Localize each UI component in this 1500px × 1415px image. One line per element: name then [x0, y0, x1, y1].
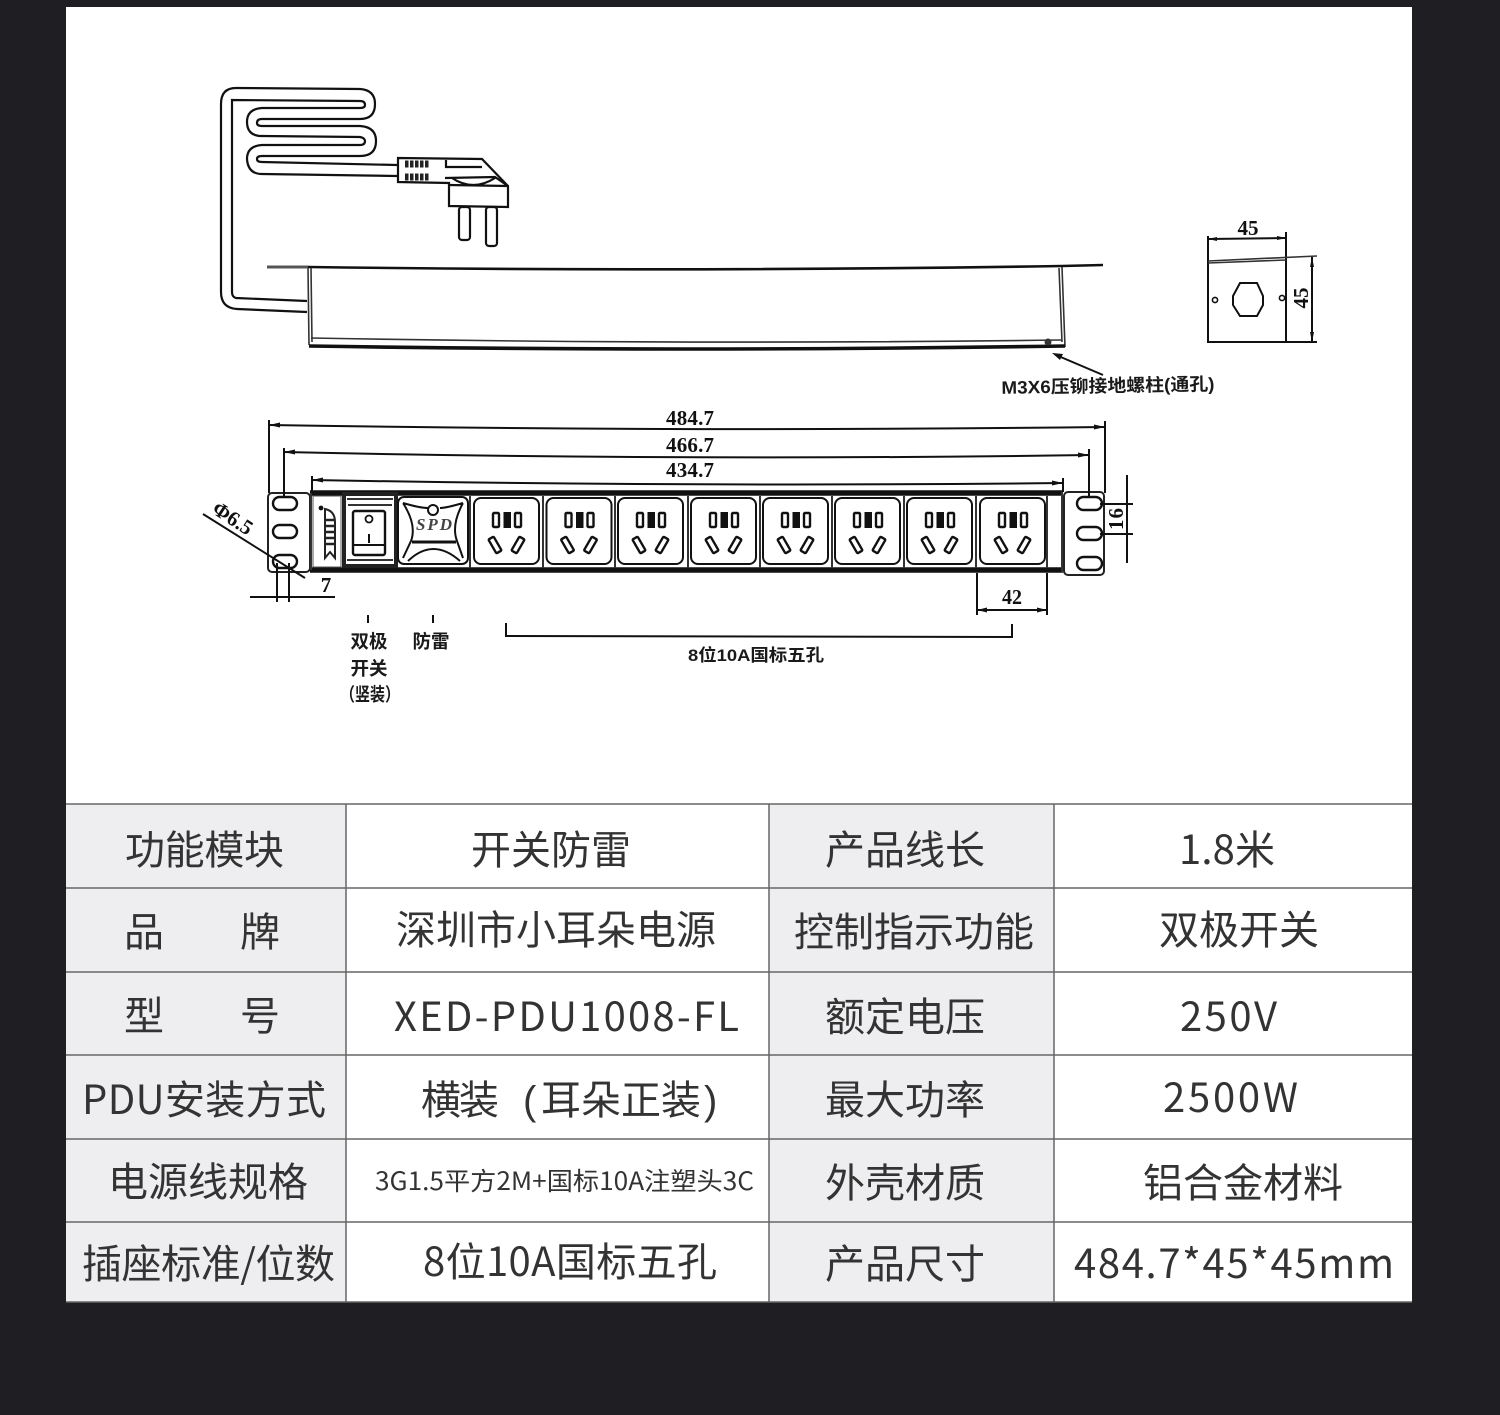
strip body: [310, 490, 1063, 572]
row: power cord: 外壳材质: [825, 1162, 985, 1206]
label cell backgrounds: [66, 804, 1054, 1302]
row: power cord: 电源线规格: [108, 1161, 308, 1205]
row: power cord: 3G1.5平方2M+国标10A注塑头3C: [375, 1162, 754, 1198]
end view with dimensions: [1208, 216, 1317, 342]
callout: double pole switch: 双极: [350, 631, 388, 652]
row: mounting: 最大功率: [825, 1079, 985, 1123]
technical drawing: power cord and plug: [221, 88, 508, 312]
row: function module: 功能模块: [125, 829, 284, 873]
row: model: XED-PDU1008-FL: [394, 985, 739, 1043]
row: model: 250V: [1180, 985, 1277, 1043]
row: socket standard: 484.7*45*45mm: [1074, 1232, 1394, 1290]
left mounting ear: [268, 493, 310, 572]
dimension: socket pitch 42: 42: [1002, 585, 1022, 609]
lightning protection module: [398, 497, 468, 564]
front view of the PDU: [268, 490, 1104, 575]
row: model: [124, 985, 1277, 1043]
callout: double pole switch: （竖装）: [340, 684, 400, 705]
dimension: 484.7: 484.7: [666, 406, 714, 430]
lightning protection module: SPD: [416, 515, 454, 534]
row: mounting: PDU安装方式: [82, 1068, 326, 1126]
rocker switch: [344, 494, 396, 566]
callout: eight sockets: 8位10A国标五孔: [688, 645, 824, 665]
right mounting ear: [1064, 492, 1104, 575]
row: function module: 1.8米: [1179, 818, 1275, 876]
arrow: ground stud: [1056, 355, 1103, 375]
hole diameter dimension: Φ6.5: [208, 496, 258, 540]
row: brand: 牌: [240, 911, 280, 955]
row: function module: [125, 818, 1275, 876]
brand cell: [313, 496, 341, 567]
row: mounting: 横装: [421, 1079, 499, 1123]
row: socket standard: 8位10A国标五孔: [423, 1230, 717, 1288]
plug: [398, 158, 508, 246]
end view with dimensions: 45: [1238, 216, 1258, 240]
row: mounting: 耳朵正装: [541, 1079, 701, 1123]
row: brand: 品: [124, 911, 164, 955]
callout: lightning protection: [412, 615, 450, 652]
row: brand: 控制指示功能: [794, 911, 1034, 955]
callout: lightning protection: 防雷: [412, 631, 450, 652]
hole diameter dimension: [203, 496, 335, 602]
power cord: [221, 88, 397, 312]
row: mounting: ): [704, 1079, 717, 1123]
dimension: 466.7: 466.7: [666, 433, 714, 457]
row: brand: 双极开关: [1159, 909, 1319, 953]
row: model: 额定电压: [825, 996, 985, 1040]
callout: eight sockets: [506, 623, 1012, 665]
row: mounting: 2500W: [1163, 1066, 1298, 1124]
side view of the PDU chassis: [267, 265, 1103, 375]
row: function module: 产品线长: [825, 829, 985, 873]
callout: double pole switch: [340, 615, 400, 705]
row: model: 号: [240, 995, 280, 1039]
dimension: socket pitch 42: [977, 573, 1047, 615]
dimension: hole spacing 16: 16: [1104, 508, 1128, 530]
hole diameter dimension: 7: [321, 573, 331, 597]
row: function module: 开关防雷: [471, 829, 631, 873]
dimension: hole spacing 16: [1100, 475, 1133, 563]
row: socket standard: [82, 1230, 1394, 1290]
row: power cord: 铝合金材料: [1143, 1162, 1343, 1206]
width dimension lines: [269, 406, 1105, 498]
ground stud label: M3X6压铆接地螺柱(通孔): [1001, 374, 1215, 398]
panel: drawing background: [66, 7, 1412, 804]
row: mounting: [82, 1066, 1298, 1126]
row: power cord: [108, 1161, 1343, 1206]
row: socket standard: 插座标准/位数: [82, 1232, 335, 1290]
row: socket standard: 产品尺寸: [825, 1243, 985, 1287]
spec table: [66, 804, 1412, 1302]
end view with dimensions: 45: [1289, 288, 1313, 308]
dimension: 434.7: 434.7: [666, 458, 714, 482]
row: brand: [124, 909, 1319, 955]
eight sockets: [474, 498, 1045, 564]
row: model: 型: [124, 995, 164, 1039]
callout: double pole switch: 开关: [350, 658, 388, 679]
row: mounting: (: [523, 1079, 537, 1123]
row: brand: 深圳市小耳朵电源: [396, 909, 716, 953]
